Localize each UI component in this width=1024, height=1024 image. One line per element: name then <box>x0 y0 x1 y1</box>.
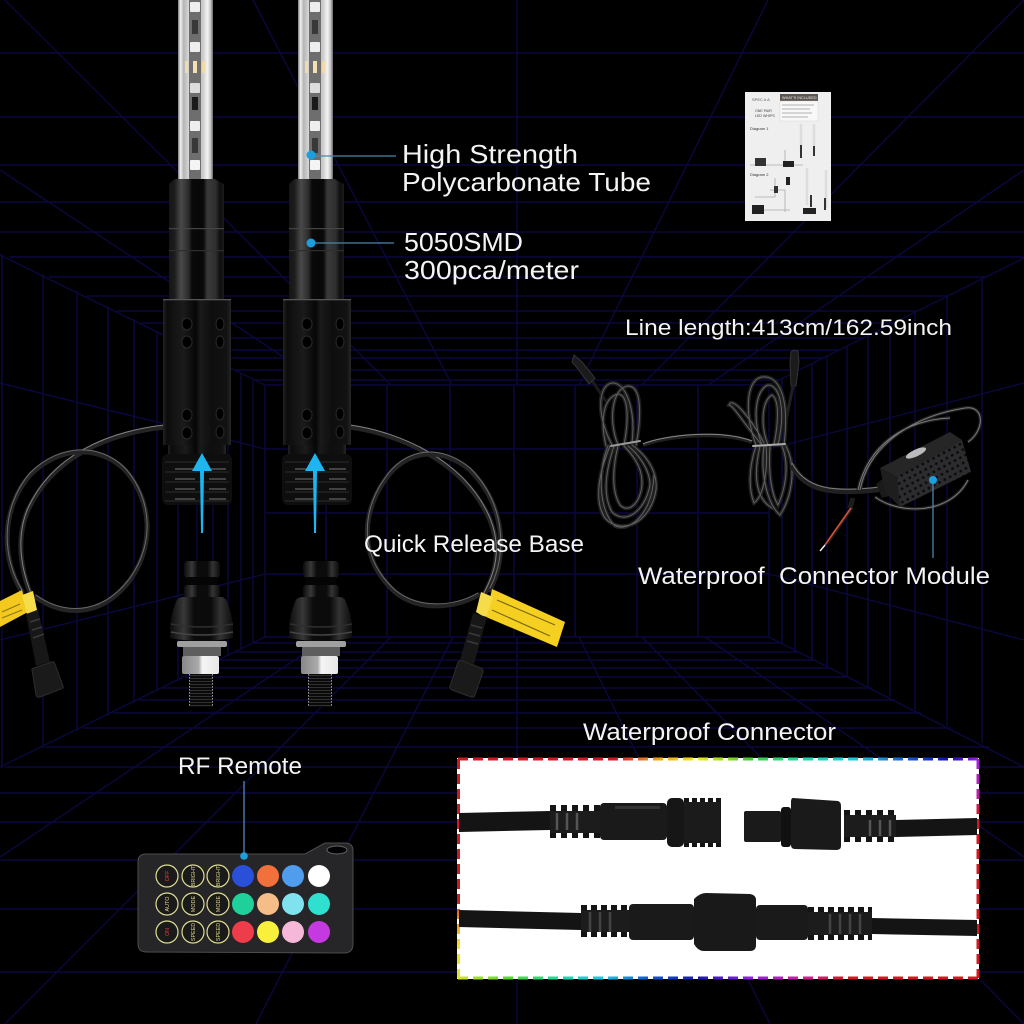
remote button labels: SPEED <box>216 923 222 941</box>
left cable label and connector <box>0 590 63 697</box>
remote button labels: OFF <box>165 870 171 881</box>
connector: joined plugs <box>459 893 977 951</box>
label: connector module: Waterproof Connector Module <box>638 563 990 590</box>
label: RF remote: RF Remote <box>178 753 302 780</box>
remote button labels: BRIGHT <box>216 865 222 886</box>
label: line length: Line length:413cm/162.59inch <box>625 315 952 340</box>
label: 5050SMD: 5050SMD <box>404 227 523 257</box>
label: 5050SMD <box>404 227 579 285</box>
waterproof connector photo panel <box>457 758 979 979</box>
remote function buttons <box>156 865 229 943</box>
harness: link wire <box>643 434 752 445</box>
label: polycarbonate tube: Polycarbonate Tube <box>402 167 651 197</box>
harness: red power wire <box>820 498 853 551</box>
leader: 5050SMD <box>306 238 394 248</box>
connector: top right plug <box>744 798 977 850</box>
left cable <box>7 425 164 610</box>
RF remote control <box>138 843 353 953</box>
connector module box <box>876 432 971 507</box>
remote dot <box>240 852 248 860</box>
remote button labels: MODE <box>191 896 197 912</box>
leader: RF remote <box>243 781 245 856</box>
harness: wires to module <box>792 408 980 509</box>
instruction booklet <box>745 92 831 221</box>
arrow up 2 <box>305 453 325 533</box>
label: polycarbonate tube: High Strength <box>402 139 578 169</box>
arrow up 1 <box>192 453 212 533</box>
remote button labels: BRIGHT <box>191 865 197 886</box>
instruction booklet: SPEC # A <box>752 97 770 102</box>
instruction booklet: ONE PAIR <box>755 109 772 113</box>
label: 5050SMD: 300pca/meter <box>404 255 579 285</box>
instruction booklet: Diagram 1 <box>750 126 769 131</box>
quick release base 1 <box>170 561 233 707</box>
instruction booklet: Diagram 2 <box>750 172 769 177</box>
remote color buttons <box>232 865 330 943</box>
remote button labels: MODE <box>216 896 222 912</box>
wand 1 <box>162 0 232 505</box>
right cable <box>350 425 501 606</box>
remote button labels: SPEED <box>191 923 197 941</box>
harness: wire coil 2 <box>729 350 799 515</box>
rainbow dashed frame <box>458 759 978 978</box>
label: quick release base: Quick Release Base <box>364 531 584 558</box>
leader: connector module <box>929 476 937 558</box>
wand 2 <box>282 0 352 505</box>
instruction booklet: LED WHIPS <box>755 114 775 118</box>
remote button labels <box>165 865 222 941</box>
label: waterproof connector: Waterproof Connector <box>583 719 836 746</box>
harness: wire coil 1 <box>572 355 656 527</box>
connector: top left plug <box>459 798 722 847</box>
remote button labels: ON <box>165 928 171 936</box>
quick release base 2 <box>289 561 352 707</box>
leader: polycarbonate tube <box>306 150 396 160</box>
right cable label and connector <box>450 589 565 697</box>
instruction booklet: WHAT'S INCLUDED <box>782 96 817 100</box>
remote button labels: AUTO <box>165 897 171 911</box>
label: polycarbonate tube <box>402 139 651 197</box>
